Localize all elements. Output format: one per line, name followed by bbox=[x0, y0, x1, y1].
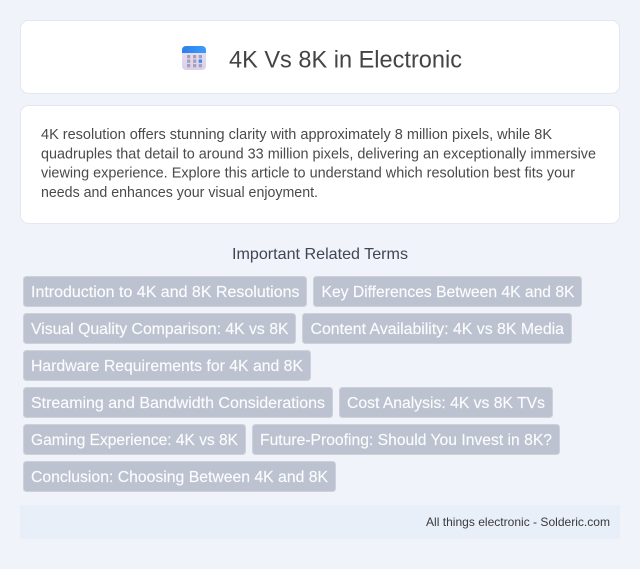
chip: gaming: Gaming Experience: 4K vs 8K bbox=[31, 432, 238, 449]
chip: streaming bbox=[24, 388, 332, 418]
chip: key differences: Key Differences Between 4K and 8K bbox=[322, 284, 575, 301]
icon: calendar bbox=[182, 46, 206, 70]
description text: viewing experience. Explore this article to understand which resolution best fits your bbox=[41, 166, 575, 182]
title: 4K Vs 8K in Electronic bbox=[229, 46, 462, 74]
chip: cost analysis bbox=[340, 388, 552, 418]
chip: visual quality bbox=[24, 314, 296, 344]
chip: gaming bbox=[24, 424, 246, 454]
chip: visual quality: Visual Quality Comparison: 4K vs 8K bbox=[31, 321, 289, 338]
chip: hardware: Hardware Requirements for 4K and 8K bbox=[31, 358, 303, 375]
footer text: All things electronic - Solderic.com bbox=[426, 515, 610, 529]
chip: key differences bbox=[314, 276, 582, 306]
chip: introduction: Introduction to 4K and 8K Resolutions bbox=[31, 284, 300, 301]
chip: hardware bbox=[24, 350, 310, 380]
term chips bbox=[24, 276, 582, 492]
chip: conclusion bbox=[24, 462, 336, 492]
panel: description bbox=[20, 106, 620, 224]
chip: content availability: Content Availability: 4K vs 8K Media bbox=[310, 321, 564, 338]
description text: 4K resolution offers stunning clarity with approximately 8 million pixels, while 8K bbox=[41, 127, 552, 143]
panel: header bbox=[20, 20, 620, 94]
chip: streaming: Streaming and Bandwidth Considerations bbox=[31, 395, 325, 412]
chip: cost analysis: Cost Analysis: 4K vs 8K TVs bbox=[347, 395, 545, 412]
description text: quadruples that detail to around 33 million pixels, delivering an exceptionally immersive bbox=[41, 146, 596, 162]
chip: future-proofing bbox=[252, 424, 560, 454]
chip: introduction bbox=[24, 276, 306, 306]
description text: needs and enhances your visual enjoyment. bbox=[41, 185, 318, 201]
chip: conclusion: Conclusion: Choosing Between 4K and 8K bbox=[31, 469, 328, 486]
footer bbox=[20, 505, 620, 539]
heading: related terms: Important Related Terms bbox=[232, 246, 408, 263]
chip: content availability bbox=[302, 314, 572, 344]
description text bbox=[41, 127, 596, 201]
chip: future-proofing: Future-Proofing: Should You Invest in 8K? bbox=[260, 432, 552, 449]
